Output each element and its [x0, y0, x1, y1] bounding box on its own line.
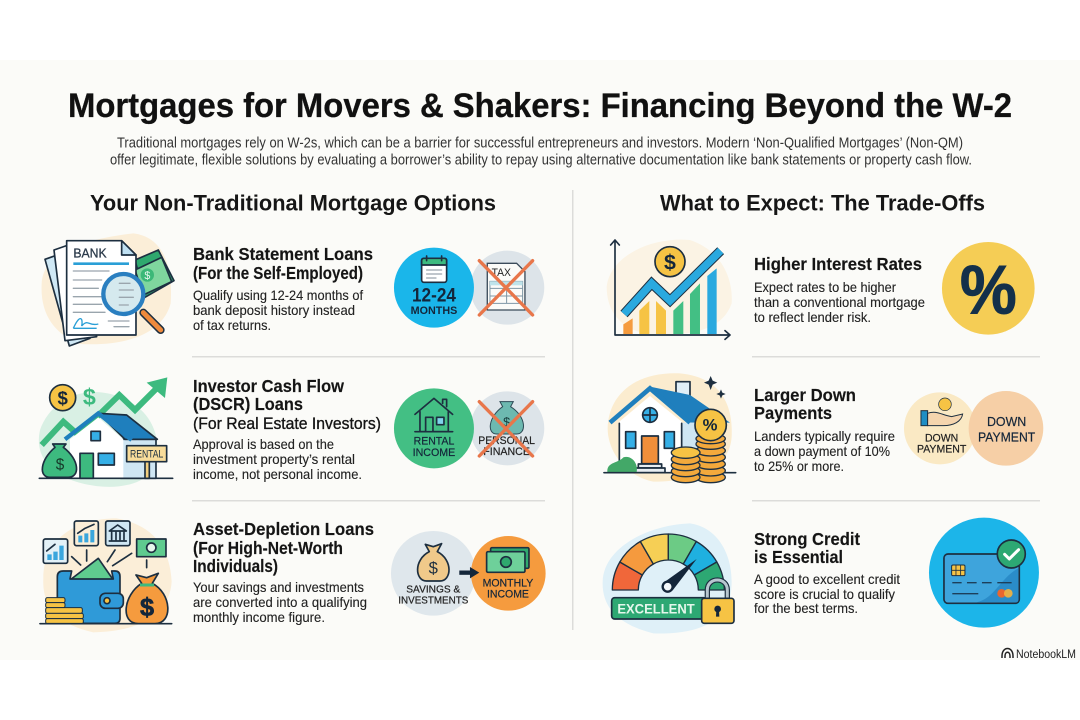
icon: rental house with rising arrow: RENTAL: [130, 449, 163, 461]
badges: 12-24 months replaces tax returns: [394, 248, 544, 328]
heading: higher interest rates: Higher Interest Rates: [754, 254, 922, 274]
badge: no tax returns: [470, 251, 544, 325]
description: investor cash flow loans: income, not personal income.: [193, 466, 362, 482]
heading: larger down payments: [754, 385, 856, 423]
badge: hand with coin: PAYMENT: [917, 444, 967, 456]
heading: trade-offs column: What to Expect: The Trade-Offs: [660, 190, 985, 216]
heading: bank statement loans: Bank Statement Loans: [193, 244, 373, 264]
heading: larger down payments: Payments: [754, 403, 832, 423]
heading: bank statement loans: (For the Self-Employed): [193, 263, 363, 283]
description: bank statement loans: of tax returns.: [193, 317, 271, 333]
icon: rising rate chart: $: [664, 250, 676, 274]
badge: percent: %: [960, 252, 1017, 328]
badge: 12-24 months: [394, 248, 474, 328]
icon: rental house with rising arrow: $: [56, 456, 65, 473]
heading: investor cash flow loans: (DSCR) Loans: [193, 394, 303, 414]
badge: rental income: RENTAL: [414, 435, 454, 447]
icon: credit score gauge with lock: [603, 523, 734, 633]
description: investor cash flow loans: [193, 436, 362, 482]
arrow: savings to income: [459, 567, 479, 578]
badge: monthly income: [471, 536, 546, 611]
description: bank statement loans: bank deposit history instead: [193, 302, 355, 318]
intro text: offer legitimate, flexible solutions by evaluating a borrower’s ability to repay using alternative documentation like bank statements or property cash flow.: [110, 152, 972, 168]
heading: investor cash flow loans: Investor Cash Flow: [193, 376, 344, 396]
icon: rental house with rising arrow: [39, 377, 173, 487]
description: strong credit: [754, 571, 900, 616]
badge: credit card with check: [929, 518, 1039, 628]
badge: savings and investments: SAVINGS &: [406, 584, 460, 595]
description: asset-depletion loans: [193, 579, 367, 625]
icon: rental house with rising arrow: $: [57, 387, 68, 408]
heading: options column: Your Non-Traditional Mortgage Options: [90, 190, 496, 216]
description: asset-depletion loans: Your savings and investments: [193, 579, 364, 595]
description: higher interest rates: Expect rates to be higher: [754, 279, 896, 295]
badge: no personal finance: FINANCE: [483, 446, 530, 458]
description: bank statement loans: Qualify using 12-24 months of: [193, 287, 363, 303]
badge: percent: [942, 242, 1035, 335]
heading: asset-depletion loans: Individuals): [193, 556, 278, 576]
heading: investor cash flow loans: (For Real Estate Investors): [193, 414, 381, 433]
panel: strong credit: [603, 518, 1039, 633]
icon: house with coin stacks: [604, 373, 736, 483]
description: strong credit: A good to excellent credit: [754, 571, 900, 587]
icon: bank statement with magnifier: $: [144, 270, 150, 282]
badge: monthly income: MONTHLY: [483, 578, 534, 590]
heading: strong credit: is Essential: [754, 547, 843, 567]
badge: no personal finance: [470, 391, 544, 465]
badges: rental income replaces personal finance: [394, 388, 544, 468]
heading: asset-depletion loans: (For High-Net-Worth: [193, 538, 343, 558]
badge: down payment: DOWN: [987, 414, 1026, 429]
badge: no tax returns: TAX: [492, 267, 511, 279]
icon: wallet, assets and money bag: $: [140, 594, 154, 622]
description: larger down payments: to 25% or more.: [754, 458, 844, 474]
badge: no personal finance: PERSONAL: [478, 435, 535, 447]
icon: bank statement with magnifier: [42, 233, 174, 346]
description: higher interest rates: to reflect lender risk.: [754, 309, 871, 325]
badge: rental income: [394, 388, 474, 468]
panel: larger down payments: [604, 373, 1043, 483]
heading: investor cash flow loans: [193, 376, 381, 433]
badge: no personal finance: $: [503, 416, 510, 430]
description: higher interest rates: than a conventional mortgage: [754, 294, 925, 310]
notebooklm watermark: NotebookLM: [1016, 649, 1076, 661]
badge: hand with coin: DOWN: [925, 432, 958, 444]
intro text: Traditional mortgages rely on W-2s, which can be a barrier for successful entrepreneurs and investors. Modern ‘Non-Qualified Mortgages’ (Non-QM): [117, 136, 963, 152]
description: strong credit: score is crucial to qualify: [754, 586, 895, 602]
badge: monthly income: INCOME: [487, 589, 529, 601]
description: higher interest rates: [754, 279, 925, 325]
badge: rental income: INCOME: [413, 447, 455, 459]
description: larger down payments: Landers typically require: [754, 428, 895, 444]
description: investor cash flow loans: Approval is based on the: [193, 436, 334, 452]
badge: hand with coin: [904, 392, 976, 464]
panel: bank statement loans: [42, 233, 544, 346]
badge: 12-24 months: 12-24: [412, 286, 456, 307]
description: investor cash flow loans: investment property’s rental: [193, 451, 355, 467]
panel: asset-depletion loans: [40, 518, 546, 632]
badge: savings and investments: INVESTMENTS: [398, 595, 468, 606]
heading: asset-depletion loans: Asset-Depletion Loans: [193, 519, 374, 539]
heading: bank statement loans: [193, 244, 373, 283]
description: bank statement loans: [193, 287, 363, 333]
description: larger down payments: a down payment of 10%: [754, 443, 890, 459]
panel: higher interest rates: [607, 240, 1035, 339]
badges: down payment: [904, 391, 1043, 466]
icon: bank statement with magnifier: BANK: [73, 247, 107, 261]
icon: credit score gauge with lock: EXCELLENT: [617, 602, 695, 617]
heading: larger down payments: Larger Down: [754, 385, 856, 405]
heading: strong credit: Strong Credit: [754, 529, 860, 549]
badge: down payment: PAYMENT: [978, 429, 1035, 444]
description: strong credit: for the best terms.: [754, 600, 858, 616]
description: larger down payments: [754, 428, 895, 474]
badge: down payment: [969, 391, 1043, 466]
badge: 12-24 months: MONTHS: [411, 305, 458, 317]
intro text: [110, 136, 972, 168]
icon: house with coin stacks: %: [703, 416, 718, 435]
icon: wallet, assets and money bag: [40, 518, 172, 632]
description: asset-depletion loans: are converted into a qualifying: [193, 594, 367, 610]
panel: investor cash flow DSCR loans: [39, 376, 544, 487]
title: Mortgages for Movers & Shakers: Financing Beyond the W-2: [68, 87, 1012, 125]
heading: asset-depletion loans: [193, 519, 374, 576]
badge: savings and investments: [391, 531, 476, 616]
icon: rental house with rising arrow: $: [83, 384, 96, 410]
icon: rising rate chart: [607, 240, 732, 339]
description: asset-depletion loans: monthly income figure.: [193, 609, 325, 625]
badges: savings convert to monthly income: [391, 531, 546, 616]
heading: strong credit: [754, 529, 860, 567]
badge: savings and investments: $: [429, 558, 438, 577]
